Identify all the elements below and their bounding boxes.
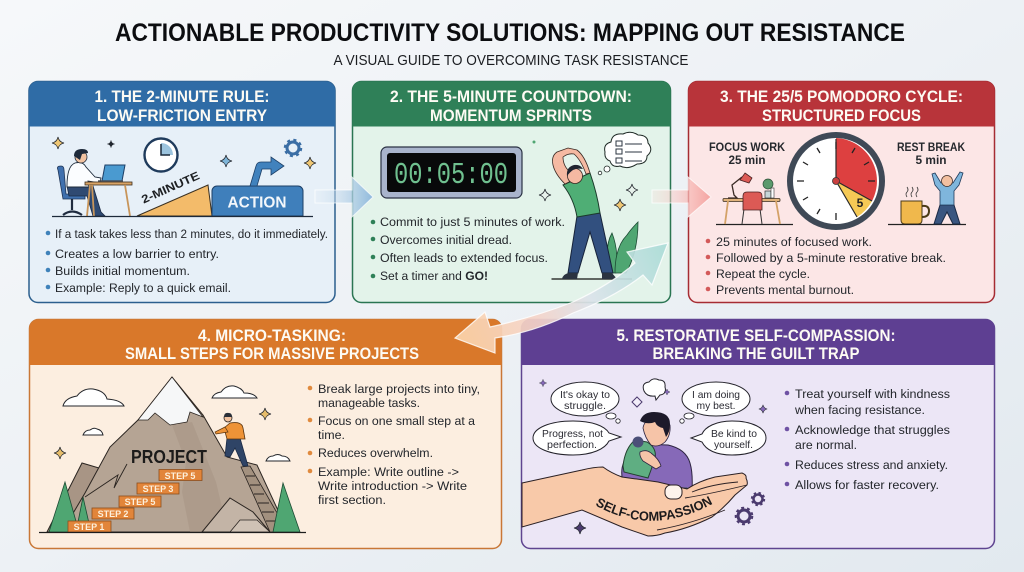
pomodoro clock [790,135,882,227]
sparkles [539,379,767,534]
panel 4 bullets: first section. [318,493,386,507]
icon: person working at desk [57,149,132,216]
icon: gears [736,493,764,524]
speech bubble: be kind: Be kind to [711,428,757,440]
panel 1 bullets: Builds initial momentum. [55,264,190,278]
panel 3 bullets: Repeat the cycle. [716,267,810,281]
panel 3 header: 3. THE 25/5 POMODORO CYCLE: [720,88,963,106]
panel 1: 2-minute rule [29,82,335,302]
panel 5 bullets: Reduces stress and anxiety. [795,458,948,472]
panel 4 bullets: time. [318,428,345,442]
rest break label: REST BREAK [897,140,965,154]
panel 1 bullets: If a task takes less than 2 minutes, do it immediately. [55,227,328,241]
panel 4 body [30,320,502,548]
focus work label: 25 min [728,153,766,167]
speech bubble: progress [533,421,621,455]
rest break label: 5 min [916,153,946,167]
steps: STEP 5 [125,497,155,507]
yellow 5-minute wedge [836,181,872,217]
icon: up-right arrow [250,157,284,186]
icon: thought cloud [643,379,665,400]
icon: action block [212,186,303,216]
panel 2 header: MOMENTUM SPRINTS [430,107,592,125]
panel 2 header [352,82,670,126]
speech bubble: doing my best [680,382,750,423]
panel 4 bullets: Reduces overwhelm. [318,446,433,460]
steps: STEP 1 [74,522,104,532]
icon: person hugging self [622,412,692,498]
panel 1 bullets: Example: Reply to a quick email. [55,281,231,295]
icon: stretching person [552,148,632,279]
panel 4 bullets: Focus on one small step at a [318,414,475,428]
arrow: panel 1 to panel 2 [315,177,373,217]
speech bubble: progress: Progress, not [542,428,603,440]
speech bubble: it's okay: struggle. [564,400,606,412]
panel 1 bullets: Creates a low barrier to entry. [55,247,219,261]
clouds [63,386,290,461]
speech bubble: progress: perfection. [547,439,597,451]
sparkles [54,408,271,459]
steps: STEP 5 [165,471,195,481]
panel 4 bullets: Break large projects into tiny, [318,382,480,396]
panel 2 header: 2. THE 5-MINUTE COUNTDOWN: [390,88,632,106]
hand label: SELF-COMPASSION [596,496,712,521]
panel 4 header: 4. MICRO-TASKING: [198,327,346,345]
panel 5 bullets: are normal. [795,438,857,452]
panel 5 bullets: Acknowledge that struggles [795,423,950,437]
panel 4 header [30,320,502,365]
panel 5: self-compassion [520,318,996,550]
icon: person with arms raised [932,172,963,224]
speech bubble: be kind [691,421,766,455]
icon: climber [215,413,248,466]
steps [68,470,202,532]
panel 5 body [522,320,994,548]
panel 5 bullets: Allows for faster recovery. [795,478,939,492]
ground line [52,216,313,218]
panel 3 bullets: Followed by a 5-minute restorative break. [716,251,946,265]
icon: open hand [522,467,747,536]
panel 2 body [352,82,670,302]
project label: PROJECT [131,446,208,467]
panel 2 bullets: Overcomes initial dread. [380,233,512,247]
speech bubble: doing my best: my best. [696,400,736,412]
speech bubble: it's okay: It's okay to [560,389,610,401]
panel 3 bullets: Prevents mental burnout. [716,283,854,297]
panel 5 bullets [785,387,950,492]
digital timer: 00:05:00 [394,158,508,193]
panel 4 bullets: Example: Write outline -> [318,465,459,479]
panel 2 bullets: Set a timer and GO! [380,269,488,283]
panel 5 header: 5. RESTORATIVE SELF-COMPASSION: [616,327,896,345]
icon: mountain [47,377,288,532]
icon: ramp with 2-minute label: 2-MINUTE [140,170,202,206]
sparkles [52,137,316,169]
steps: STEP 2 [98,509,128,519]
panel 4 header: SMALL STEPS FOR MASSIVE PROJECTS [125,345,419,363]
arrow: double-headed curved arrow between panels [455,243,668,353]
clock pivot [832,178,840,184]
panel 1 header: 1. THE 2-MINUTE RULE: [94,88,270,106]
panel 3: pomodoro cycle [688,82,994,302]
ground line [39,532,306,534]
panel 2 bullets [371,215,565,283]
panel 2 bullets: Commit to just 5 minutes of work. [380,215,565,229]
icon: ramp with 2-minute label [137,170,212,216]
panel 3 body [688,82,994,302]
rest break label [897,140,965,167]
panel 4: micro-tasking [30,320,502,548]
icon: clock [144,138,178,172]
panel 5 bullets: when facing resistance. [794,403,925,417]
title: ACTIONABLE PRODUCTIVITY SOLUTIONS: MAPPING OUT RESISTANCE [115,19,905,47]
panel 3 header [688,82,994,126]
panel 3 bullets [706,235,946,297]
arrow: panel 2 to panel 3 [652,177,711,217]
icon: plant [607,222,638,273]
tick marks [797,142,875,220]
panel 2 bullets: Often leads to extended focus. [380,251,548,265]
clock hands [836,139,872,217]
panel 3 bullets: 25 minutes of focused work. [716,235,872,249]
panel 5 bullets: Treat yourself with kindness [795,387,950,401]
speech bubble: be kind: yourself. [714,439,753,451]
digital timer [381,147,522,198]
focus work label [709,140,785,167]
panel 1 bullets [46,227,328,295]
wedge label: 5 [857,196,864,210]
icon: coffee mug [888,187,966,224]
icon: action block: ACTION [228,194,286,212]
panel 1 body [29,82,335,302]
icon: desk with lamp and chair [716,173,793,224]
panel 4 bullets [308,382,480,507]
focus work label: FOCUS WORK [709,140,785,154]
panel 5 header: BREAKING THE GUILT TRAP [652,345,860,363]
icon: gear [285,140,301,156]
panel 3 header: STRUCTURED FOCUS [762,107,921,125]
subtitle: A VISUAL GUIDE TO OVERCOMING TASK RESISTANCE [334,52,688,69]
panel 5 header [522,320,994,365]
panel 4 bullets: Write introduction -> Write [318,479,467,493]
icon: trees [49,482,300,532]
panel 2: 5-minute countdown [352,82,670,302]
icon: thought cloud checklist [598,132,651,175]
speech bubble: it's okay [551,382,620,423]
speech bubble: doing my best: I am doing [692,389,740,401]
panel 1 header [29,82,335,126]
panel 4 bullets: manageable tasks. [318,396,420,410]
sparkles [532,140,638,211]
red 25-minute wedge [836,138,877,201]
panel 1 header: LOW-FRICTION ENTRY [97,107,267,125]
steps: STEP 3 [143,484,173,494]
